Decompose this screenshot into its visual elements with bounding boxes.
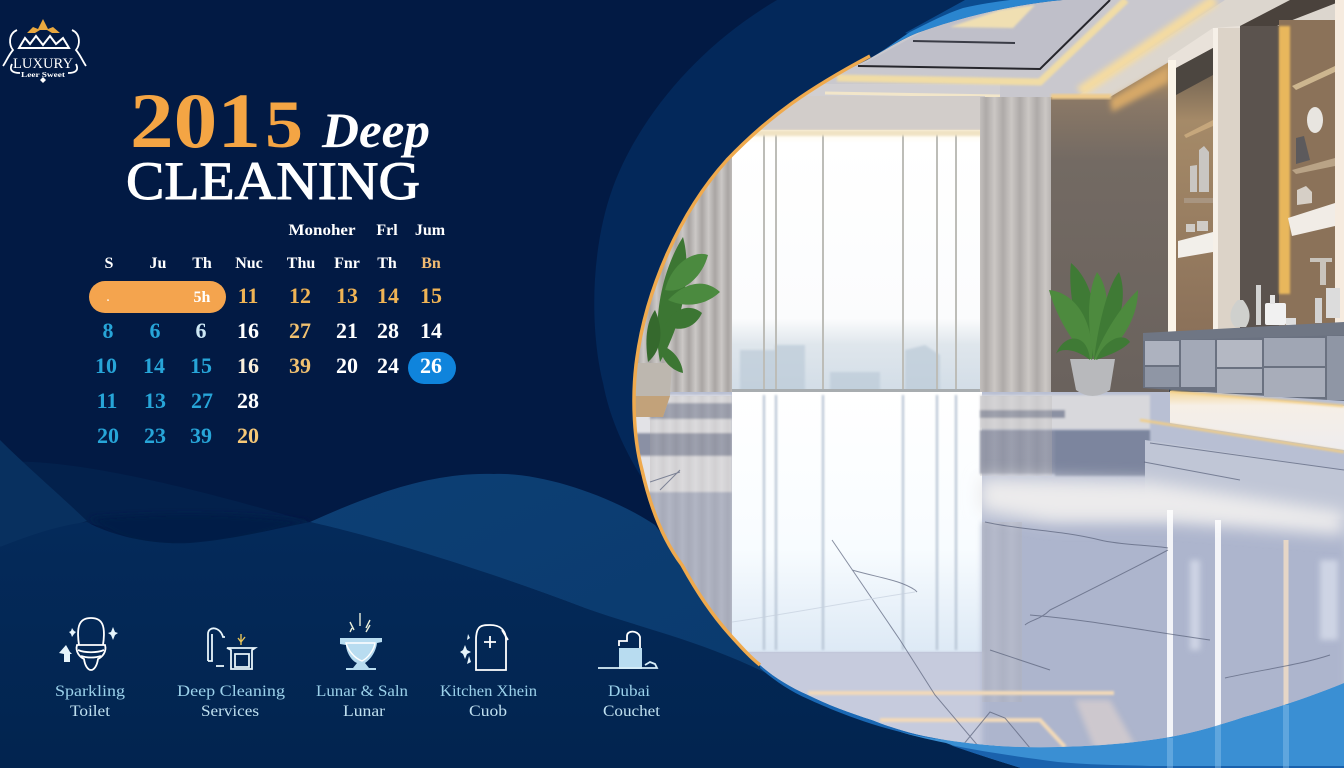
- date row 3: 24: [377, 353, 399, 378]
- logo tagline: Leer Sweet: [21, 71, 66, 79]
- floor: [630, 392, 1344, 768]
- left wave sliver: [0, 440, 87, 547]
- title: [126, 77, 430, 211]
- upper wall: [761, 96, 985, 130]
- icon: toilet: [77, 618, 105, 670]
- date row 3: 20: [336, 353, 358, 378]
- date row 3: 39: [289, 353, 311, 378]
- calendar: [89, 222, 456, 448]
- date row 4: 13: [144, 388, 166, 413]
- date row 2: 21: [336, 318, 358, 343]
- icon: sparkle burst: [350, 613, 370, 632]
- calendar weekday row: S: [105, 255, 114, 272]
- counter: [1143, 285, 1344, 401]
- centre dark reflection: [980, 395, 1150, 476]
- logo wordmark: LUXURY: [13, 56, 73, 72]
- top outer blue band: [905, 0, 1020, 38]
- warm floor glow: [1075, 700, 1135, 750]
- title year last digit: 5: [265, 86, 303, 162]
- floor gold lines: [808, 693, 1114, 747]
- lower marble: [982, 520, 1344, 760]
- soft reflection blocks: [1190, 560, 1338, 650]
- edge dark line: [760, 665, 946, 740]
- outer blue: [760, 665, 1344, 768]
- date row 5: [97, 423, 259, 448]
- left plant: [634, 237, 720, 417]
- light blue wave: [310, 474, 780, 690]
- date row 5: 23: [144, 423, 166, 448]
- curtain reflection: [982, 522, 1022, 702]
- calendar weekday row: Fnr: [334, 255, 360, 272]
- upper soft wave: [0, 462, 310, 547]
- marble veins: [650, 443, 1344, 760]
- left plant leaves: [646, 237, 720, 373]
- date row 3: 14: [143, 353, 165, 378]
- logo ornament: [40, 77, 46, 83]
- date row 1: 15: [420, 283, 442, 308]
- service: lunar and saln: [316, 613, 408, 720]
- label second line: Lunar: [343, 703, 386, 720]
- label second line: Toilet: [70, 703, 111, 720]
- dark lower body: [0, 522, 1060, 768]
- label: Lunar & Saln: [316, 683, 408, 700]
- wicker pot: [634, 363, 672, 417]
- gold ring around photo: [634, 56, 870, 665]
- top blue band: [867, 0, 1063, 60]
- date row 2: 14: [420, 318, 442, 343]
- counter items: [1230, 285, 1340, 327]
- centre curtain: [980, 97, 1052, 396]
- calendar top headers: Jum: [415, 222, 446, 239]
- calendar weekday row: Bn: [421, 255, 441, 272]
- label: Dubai: [608, 683, 651, 700]
- date row 1: [107, 283, 442, 308]
- date row 1: 11: [238, 283, 258, 308]
- calendar top headers: Frl: [376, 222, 398, 239]
- window frame reflections: [764, 395, 956, 650]
- cabinet doors: [1145, 336, 1344, 400]
- date row 2: 16: [237, 318, 259, 343]
- blue highlight pill: [408, 352, 456, 384]
- bottom wave layers: [0, 440, 1060, 768]
- logo crest: [19, 36, 69, 48]
- label: Kitchen Xhein: [440, 683, 537, 700]
- floor lower band: [748, 652, 998, 746]
- orange highlight pill: [89, 281, 226, 313]
- date row 5: 20: [237, 423, 259, 448]
- label second line: Services: [201, 703, 259, 720]
- date row 2: 28: [377, 318, 399, 343]
- warm column on floor: [1284, 540, 1288, 705]
- date row 1: 12: [289, 283, 311, 308]
- under-lit plinth: [1170, 391, 1344, 450]
- lower dark strip: [950, 745, 1344, 768]
- date row 2: 8: [102, 318, 114, 343]
- icon: sparkles: [59, 627, 118, 662]
- date row 3: 15: [190, 353, 212, 378]
- right tiles: [1145, 440, 1152, 478]
- date row 4: 27: [191, 388, 213, 413]
- label: Sparkling: [55, 683, 125, 700]
- date row 3: 16: [237, 353, 259, 378]
- calendar weekday row: [105, 255, 441, 272]
- room photo panel: [630, 0, 1344, 768]
- logo crown: [27, 19, 60, 33]
- calendar weekday row: Nuc: [235, 255, 263, 272]
- icon: shower and cup: [208, 628, 255, 669]
- navy arc behind photo: [594, 0, 1000, 475]
- floor left reflections: [636, 394, 732, 633]
- date row 4: 28: [237, 388, 259, 413]
- date row 2: 27: [289, 318, 311, 343]
- right plant: [1049, 263, 1138, 396]
- service: deep cleaning: [177, 628, 285, 720]
- window: [730, 130, 982, 392]
- icon: cup sparkle: [238, 634, 245, 645]
- service: dubai: [598, 632, 661, 720]
- icon: arched cabinet: [476, 625, 508, 670]
- date row 3: 26: [420, 353, 442, 378]
- icon: faucet tank: [598, 632, 657, 669]
- calendar weekday row: Th: [377, 255, 397, 272]
- calendar top headers: [288, 222, 446, 239]
- date row 3: 10: [95, 353, 117, 378]
- label second line: Couchet: [603, 703, 661, 720]
- logo frame: [3, 30, 86, 73]
- left floor stripes: [650, 396, 732, 630]
- date row 5: 20: [97, 423, 119, 448]
- date row 5: 39: [190, 423, 212, 448]
- title main word: CLEANING: [126, 151, 420, 211]
- date row 1: .: [107, 293, 110, 304]
- window reflection: [732, 392, 982, 652]
- plinth gold line: [1140, 391, 1344, 452]
- bright band: [980, 478, 1344, 535]
- icon: sparkles: [460, 634, 471, 664]
- date row 1: 5h: [194, 289, 211, 306]
- service: sparkling toilet: [55, 618, 125, 720]
- calendar top headers: Monoher: [288, 222, 356, 239]
- date row 4: 11: [97, 388, 117, 413]
- plant pot: [1070, 359, 1115, 396]
- calendar weekday row: Thu: [287, 255, 315, 272]
- logo: [3, 19, 86, 83]
- curtain floor stripes: [980, 396, 1052, 476]
- left curtain: [638, 158, 732, 392]
- icon: basin: [340, 638, 382, 670]
- title script word: Deep: [321, 102, 430, 158]
- calendar weekday row: Th: [192, 255, 212, 272]
- date row 1: 13: [336, 283, 358, 308]
- bottom blue band: [760, 665, 1344, 768]
- title year: 201: [130, 77, 261, 164]
- wave shadow: [90, 514, 310, 548]
- date row 2: [102, 318, 442, 343]
- ceiling: [806, 0, 1335, 97]
- date row 1: 14: [377, 283, 399, 308]
- date row 2: 6: [150, 318, 160, 343]
- brown wall: [1051, 62, 1169, 393]
- light columns on floor: [1170, 510, 1218, 750]
- date row 4: [97, 388, 259, 413]
- date row 2: 6: [196, 318, 206, 343]
- calendar weekday row: Ju: [150, 255, 167, 272]
- service: kitchen: [440, 625, 537, 720]
- shelving column: [1168, 26, 1240, 340]
- light streaks on band: [1170, 705, 1286, 768]
- label: Deep Cleaning: [177, 683, 285, 700]
- date row 3: [95, 353, 442, 378]
- plant leaves: [1049, 263, 1138, 360]
- label second line: Cuob: [469, 703, 507, 720]
- dark column and right niche: [1240, 0, 1344, 336]
